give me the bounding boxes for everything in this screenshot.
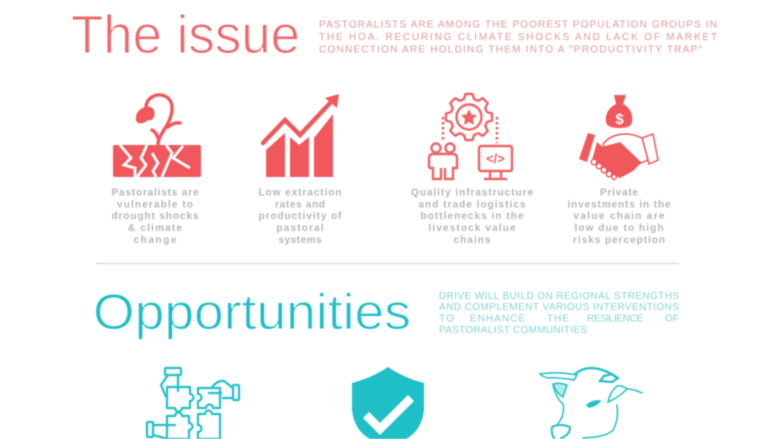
caption: low extraction rates: rates and [275,200,325,210]
icon: bar chart with rising arrow [263,94,339,177]
icon: wilting plant on cracked ground [113,95,201,177]
text block: issue summary [319,20,717,56]
caption: quality infrastructure [411,188,533,246]
caption: vulnerable to drought: change [134,235,177,246]
caption: vulnerable to drought: Pastoralists are [112,188,199,198]
icon: money bag and handshake [579,95,658,179]
caption: quality infrastructure: and trade logistics [418,200,526,210]
text block: issue summary: THE HOA. RECURING CLIMATE SHOCKS AND LACK OF MARKET [319,32,717,43]
caption: quality infrastructure: bottlenecks in the [420,211,524,222]
caption: quality infrastructure: chains [454,235,491,246]
caption: vulnerable to drought [112,188,199,246]
text block: opportunities summary [439,291,679,336]
caption: vulnerable to drought: & climate [128,223,182,234]
caption: private investments: Private [600,188,638,198]
icon: gear, people and monitor: </> [486,151,505,166]
caption: private investments: investments in the [568,200,671,210]
icon part: money bag: $ [615,111,624,128]
icon: gear, people and monitor [429,94,512,179]
caption: low extraction rates: systems [278,235,322,246]
caption: low extraction rates: pastoral [276,223,324,234]
text block: issue summary: CONNECTION ARE HOLDING THEM INTO A "PRODUCTIVITY TRAP" [319,44,702,56]
text block: opportunities summary: PASTORALIST COMMUNITIES [439,325,587,336]
text block: opportunities summary: RESILIENCE [587,314,643,324]
caption: vulnerable to drought: vulnerable to [117,200,193,210]
text block: opportunities summary: OF [665,314,679,324]
icon: hands joining puzzle pieces [147,368,239,439]
caption: private investments: risks perception [573,235,665,246]
caption: low extraction rates: productivity of [258,211,342,222]
caption: quality infrastructure: livestock value [428,223,516,234]
text block: issue summary: PASTORALISTS ARE AMONG THE POOREST POPULATION GROUPS IN [319,20,717,30]
caption: private investments: low due to high [574,223,664,234]
caption: vulnerable to drought: drought shocks [112,211,199,222]
icon: shield with check mark [352,367,424,439]
text block: opportunities summary: THE [547,314,569,324]
icon: cow head [540,368,642,439]
caption: private investments: value chain are [574,211,665,222]
text block: opportunities summary: DRIVE WILL BUILD ON REGIONAL STRENGTHS [439,291,679,302]
caption: private investments [568,188,671,246]
text block: opportunities summary: AND COMPLEMENT VARIOUS INTERVENTIONS [439,302,679,313]
caption: low extraction rates: Low extraction [258,188,342,198]
caption: low extraction rates [258,188,342,246]
text block: opportunities summary: ENHANCE [470,314,525,324]
title: Opportunities: Opportunities [93,284,411,340]
title: The issue: The issue [71,5,300,65]
caption: quality infrastructure: Quality infrastructure [411,188,533,198]
text block: opportunities summary: TO [439,314,454,324]
